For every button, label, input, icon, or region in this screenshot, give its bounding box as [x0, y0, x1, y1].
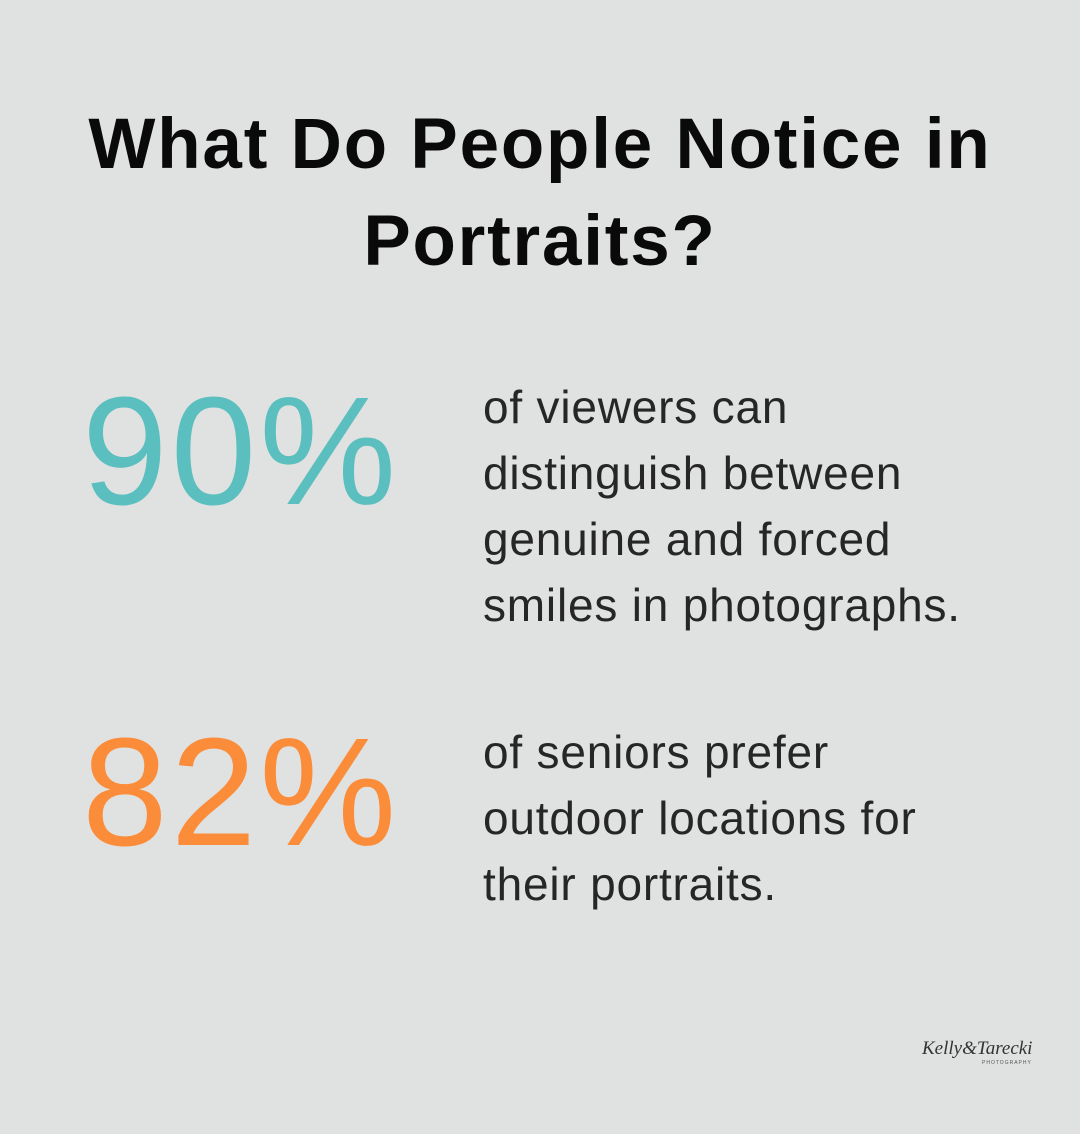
text: 82% description: of seniors prefer [483, 726, 829, 778]
text: 90% description: of viewers can [483, 381, 788, 433]
title [88, 105, 992, 281]
text: 90% description [483, 381, 961, 631]
logo: Kelly&Tarecki [922, 1038, 1032, 1059]
logo: PHOTOGRAPHY [982, 1060, 1032, 1066]
text: 90% description: smiles in photographs. [483, 579, 961, 631]
title: Portraits? [363, 202, 717, 281]
text: 90% description: distinguish between [483, 447, 902, 499]
title: What Do People Notice in [88, 105, 992, 184]
stat: 82%: 82% [82, 706, 399, 878]
stat: 90%: 90% [82, 365, 399, 537]
text: 90% description: genuine and forced [483, 513, 891, 565]
text: 82% description: their portraits. [483, 858, 777, 910]
text: 82% description [483, 726, 917, 910]
text: 82% description: outdoor locations for [483, 792, 917, 844]
